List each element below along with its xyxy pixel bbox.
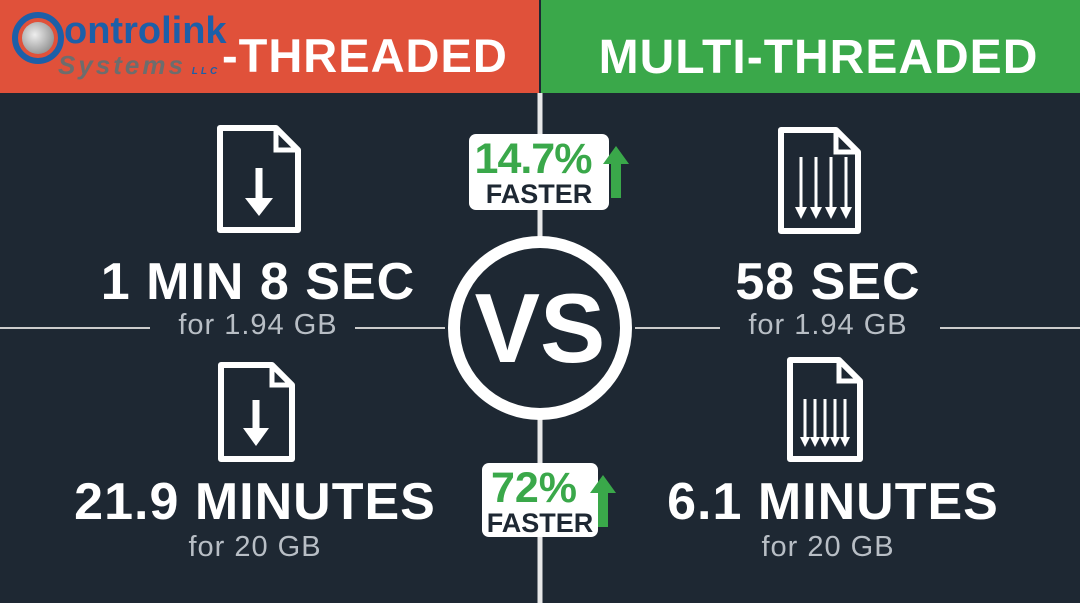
stat: 21.9 minutes: 21.9 MINUTES (74, 473, 436, 531)
badge 14.7% faster: FASTER (486, 179, 592, 209)
badge 72% faster: FASTER (487, 508, 593, 538)
text: for 20 GB (188, 531, 322, 563)
text: for 1.94 GB (178, 309, 338, 341)
badge 14.7% faster: 14.7% (475, 135, 591, 183)
badge 72% faster (482, 463, 598, 537)
stat: 6.1 minutes: 6.1 MINUTES (667, 473, 999, 531)
VS circle: VS (475, 273, 605, 383)
icon: multi download file 1 (778, 127, 861, 234)
badge 14.7% faster (469, 134, 609, 210)
title left: -THREADED (222, 29, 508, 82)
icon: single download file 1 (217, 125, 301, 233)
text: for 1.94 GB (748, 309, 908, 341)
logo: ontrolink (64, 10, 227, 52)
header: single-threaded (0, 0, 539, 93)
stat: 58 sec: 58 SEC (735, 253, 921, 311)
title right: MULTI-THREADED (599, 31, 1038, 84)
badge 72% faster: 72% (491, 464, 577, 512)
icon: single download file 2 (218, 362, 295, 462)
text: for 20 GB (761, 531, 895, 563)
icon: multi download file 2 (787, 357, 863, 462)
logo (12, 10, 227, 80)
logo: Systems LLC (58, 50, 220, 80)
stat: 1 min 8 sec: 1 MIN 8 SEC (101, 253, 415, 311)
VS circle (448, 236, 632, 420)
header: multi-threaded (541, 0, 1080, 93)
